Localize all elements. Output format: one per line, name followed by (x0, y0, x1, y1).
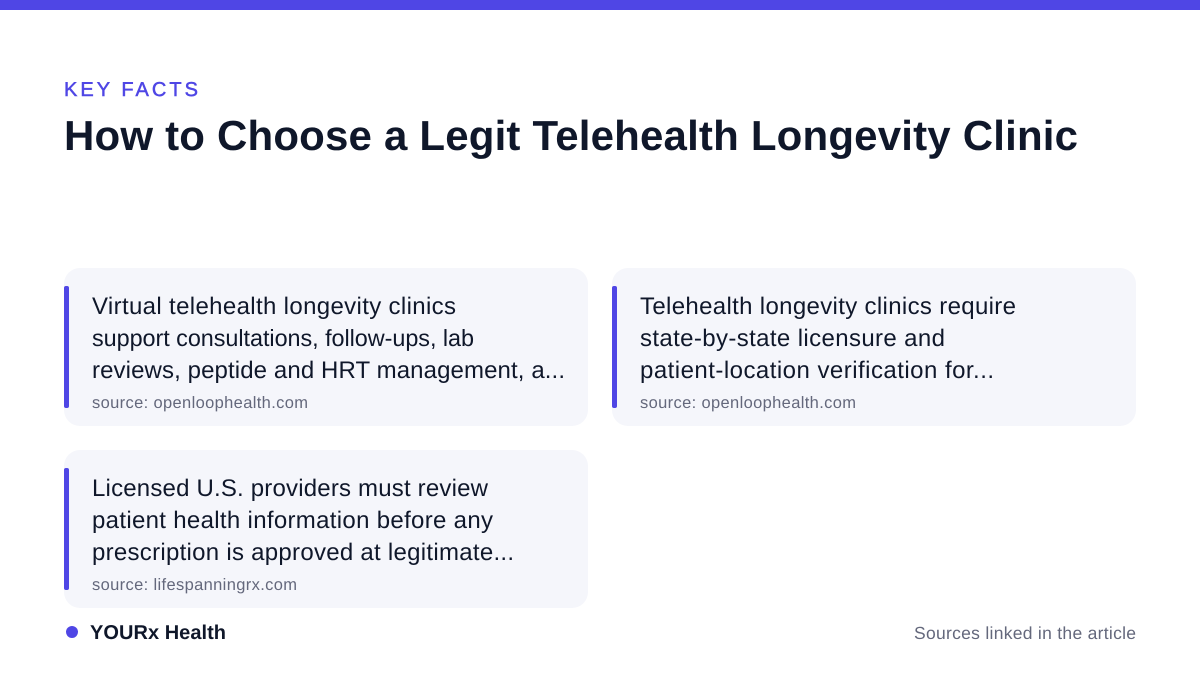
icon: brand dot (66, 626, 78, 638)
eyebrow: key facts: KEY FACTS (64, 79, 198, 101)
card 2 text: state-by-state licensure and (640, 325, 945, 352)
card 3 text: Licensed U.S. providers must review (92, 475, 489, 502)
brand name: YOURx Health (90, 622, 226, 644)
card 3 text (92, 475, 514, 566)
card 2 text: Telehealth longevity clinics require (640, 293, 1016, 320)
card 2 text (640, 293, 1016, 384)
panel: fact card 3 (64, 450, 588, 608)
card 1 text: Virtual telehealth longevity clinics (92, 293, 456, 320)
top accent bar (0, 0, 1200, 10)
panel: fact card 1 (64, 268, 588, 426)
card 3 source: source: lifespanningrx.com (92, 576, 297, 594)
card 3 accent bar (64, 468, 69, 590)
card 2 text: patient-location verification for... (640, 357, 994, 384)
card 2 accent bar (612, 286, 617, 408)
card 2 source: source: openloophealth.com (640, 394, 856, 412)
card 1 accent bar (64, 286, 69, 408)
brand footer (66, 622, 226, 644)
card 3 text: prescription is approved at legitimate... (92, 539, 514, 566)
title: How to Choose a Legit Telehealth Longevity Clinic (64, 112, 1078, 159)
card 1 text: reviews, peptide and HRT management, a... (92, 357, 565, 384)
card 1 text (92, 293, 565, 384)
panel: fact card 2 (612, 268, 1136, 426)
card 3 text: patient health information before any (92, 507, 493, 534)
card 1 source: source: openloophealth.com (92, 394, 308, 412)
card 1 text: support consultations, follow-ups, lab (92, 325, 474, 351)
footer note: Sources linked in the article (914, 623, 1136, 643)
